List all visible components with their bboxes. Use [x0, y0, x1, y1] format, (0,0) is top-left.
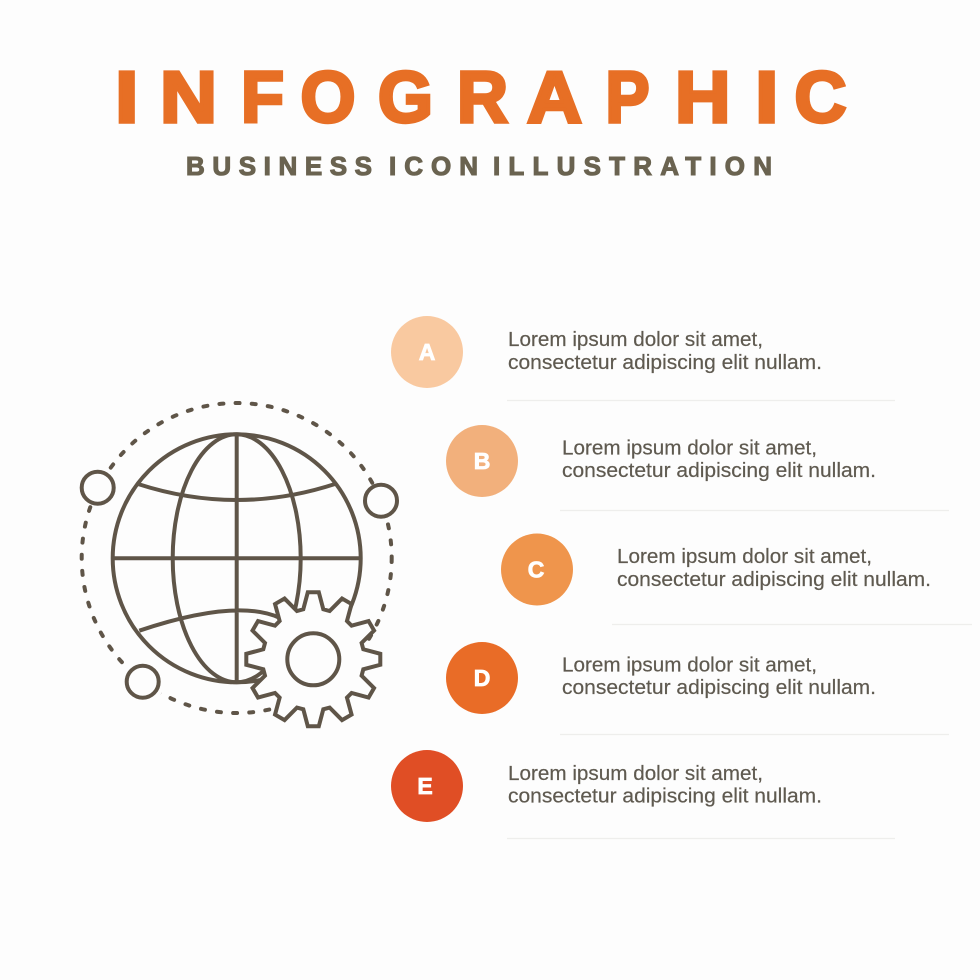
item C: C [528, 556, 544, 582]
subtitle [186, 151, 772, 181]
title: R [457, 58, 508, 138]
item A: Lorem ipsum dolor sit amet, [508, 329, 763, 351]
item D: consectetur adipiscing elit nullam. [562, 677, 876, 699]
subtitle: ILLUSTRATION [493, 151, 772, 181]
item A: A [419, 339, 435, 365]
item C [501, 534, 972, 624]
item C: consectetur adipiscing elit nullam. [617, 569, 931, 591]
title: I [115, 58, 138, 138]
title: P [606, 58, 650, 138]
item E: consectetur adipiscing elit nullam. [508, 786, 822, 808]
title: I [755, 58, 778, 138]
item E: Lorem ipsum dolor sit amet, [508, 763, 763, 785]
subtitle: ICON [389, 151, 478, 181]
title: G [378, 58, 433, 138]
title: F [241, 58, 284, 138]
gear [246, 592, 380, 726]
title [115, 58, 846, 138]
item B: Lorem ipsum dolor sit amet, [562, 438, 817, 460]
title: H [675, 58, 730, 138]
item E: E [417, 773, 433, 799]
gap in orbit around lower node [121, 660, 165, 704]
item D: D [474, 665, 490, 691]
orbit dashed ring [82, 403, 392, 713]
title: A [527, 58, 582, 138]
title: C [794, 58, 846, 138]
item D [446, 642, 949, 734]
item B [446, 425, 949, 510]
subtitle: BUSINESS [186, 151, 372, 181]
globe [113, 434, 361, 682]
item B: consectetur adipiscing elit nullam. [562, 460, 876, 482]
item A [391, 316, 895, 400]
title: N [160, 58, 217, 138]
title: O [300, 58, 356, 138]
satellite nodes [82, 472, 397, 698]
item A: consectetur adipiscing elit nullam. [508, 352, 822, 374]
item E [391, 750, 895, 838]
item B: B [474, 448, 490, 474]
item D: Lorem ipsum dolor sit amet, [562, 654, 817, 676]
icon: globe with gear and orbit [82, 403, 397, 726]
item C: Lorem ipsum dolor sit amet, [617, 546, 872, 568]
